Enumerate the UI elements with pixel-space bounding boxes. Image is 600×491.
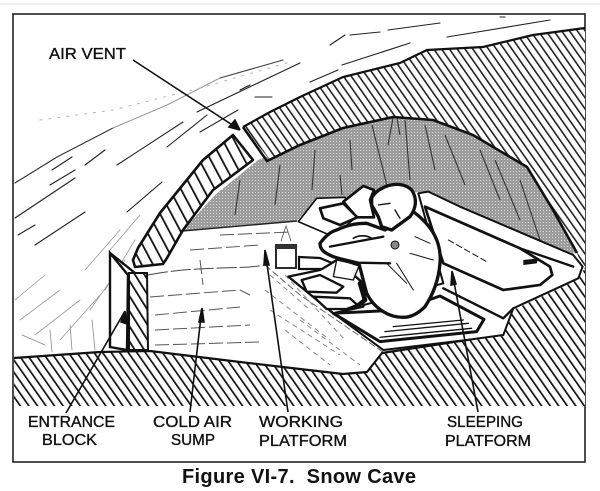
cup and stove <box>276 226 332 269</box>
label: sleeping platform: SLEEPING <box>447 414 523 431</box>
backpack <box>298 186 374 237</box>
person <box>320 212 440 317</box>
sleeping bag <box>425 207 552 290</box>
arrow: cold air sump <box>190 308 204 412</box>
label: cold air sump: SUMP <box>171 432 215 449</box>
label: air vent: AIR VENT <box>49 46 126 63</box>
entrance block <box>110 253 148 350</box>
sleeping platform <box>333 192 583 350</box>
label: sleeping platform: PLATFORM <box>445 433 531 450</box>
arrow: entrance block <box>66 311 127 413</box>
arrow: sleeping platform <box>451 271 478 412</box>
boots <box>288 260 365 313</box>
label: cold air sump: COLD AIR <box>153 414 232 431</box>
label: working platform: WORKING <box>259 414 343 431</box>
caption: Figure VI-7. Snow Cave <box>182 466 416 488</box>
arrow: working platform <box>264 250 288 412</box>
gray cave interior wall <box>182 117 577 255</box>
hatched ground <box>14 268 585 461</box>
sleeping mat <box>333 296 484 342</box>
sleeping platform and figure <box>288 184 583 350</box>
head <box>372 184 415 230</box>
floor and cold air sump <box>148 221 383 365</box>
snow surface texture <box>15 17 550 352</box>
label: working platform: PLATFORM <box>259 433 347 450</box>
label: entrance block: BLOCK <box>42 432 97 449</box>
arrow: air vent <box>133 60 240 130</box>
hatched snow roof right <box>243 28 585 268</box>
hatched snow roof left <box>133 135 253 267</box>
label: entrance block: ENTRANCE <box>28 414 115 431</box>
